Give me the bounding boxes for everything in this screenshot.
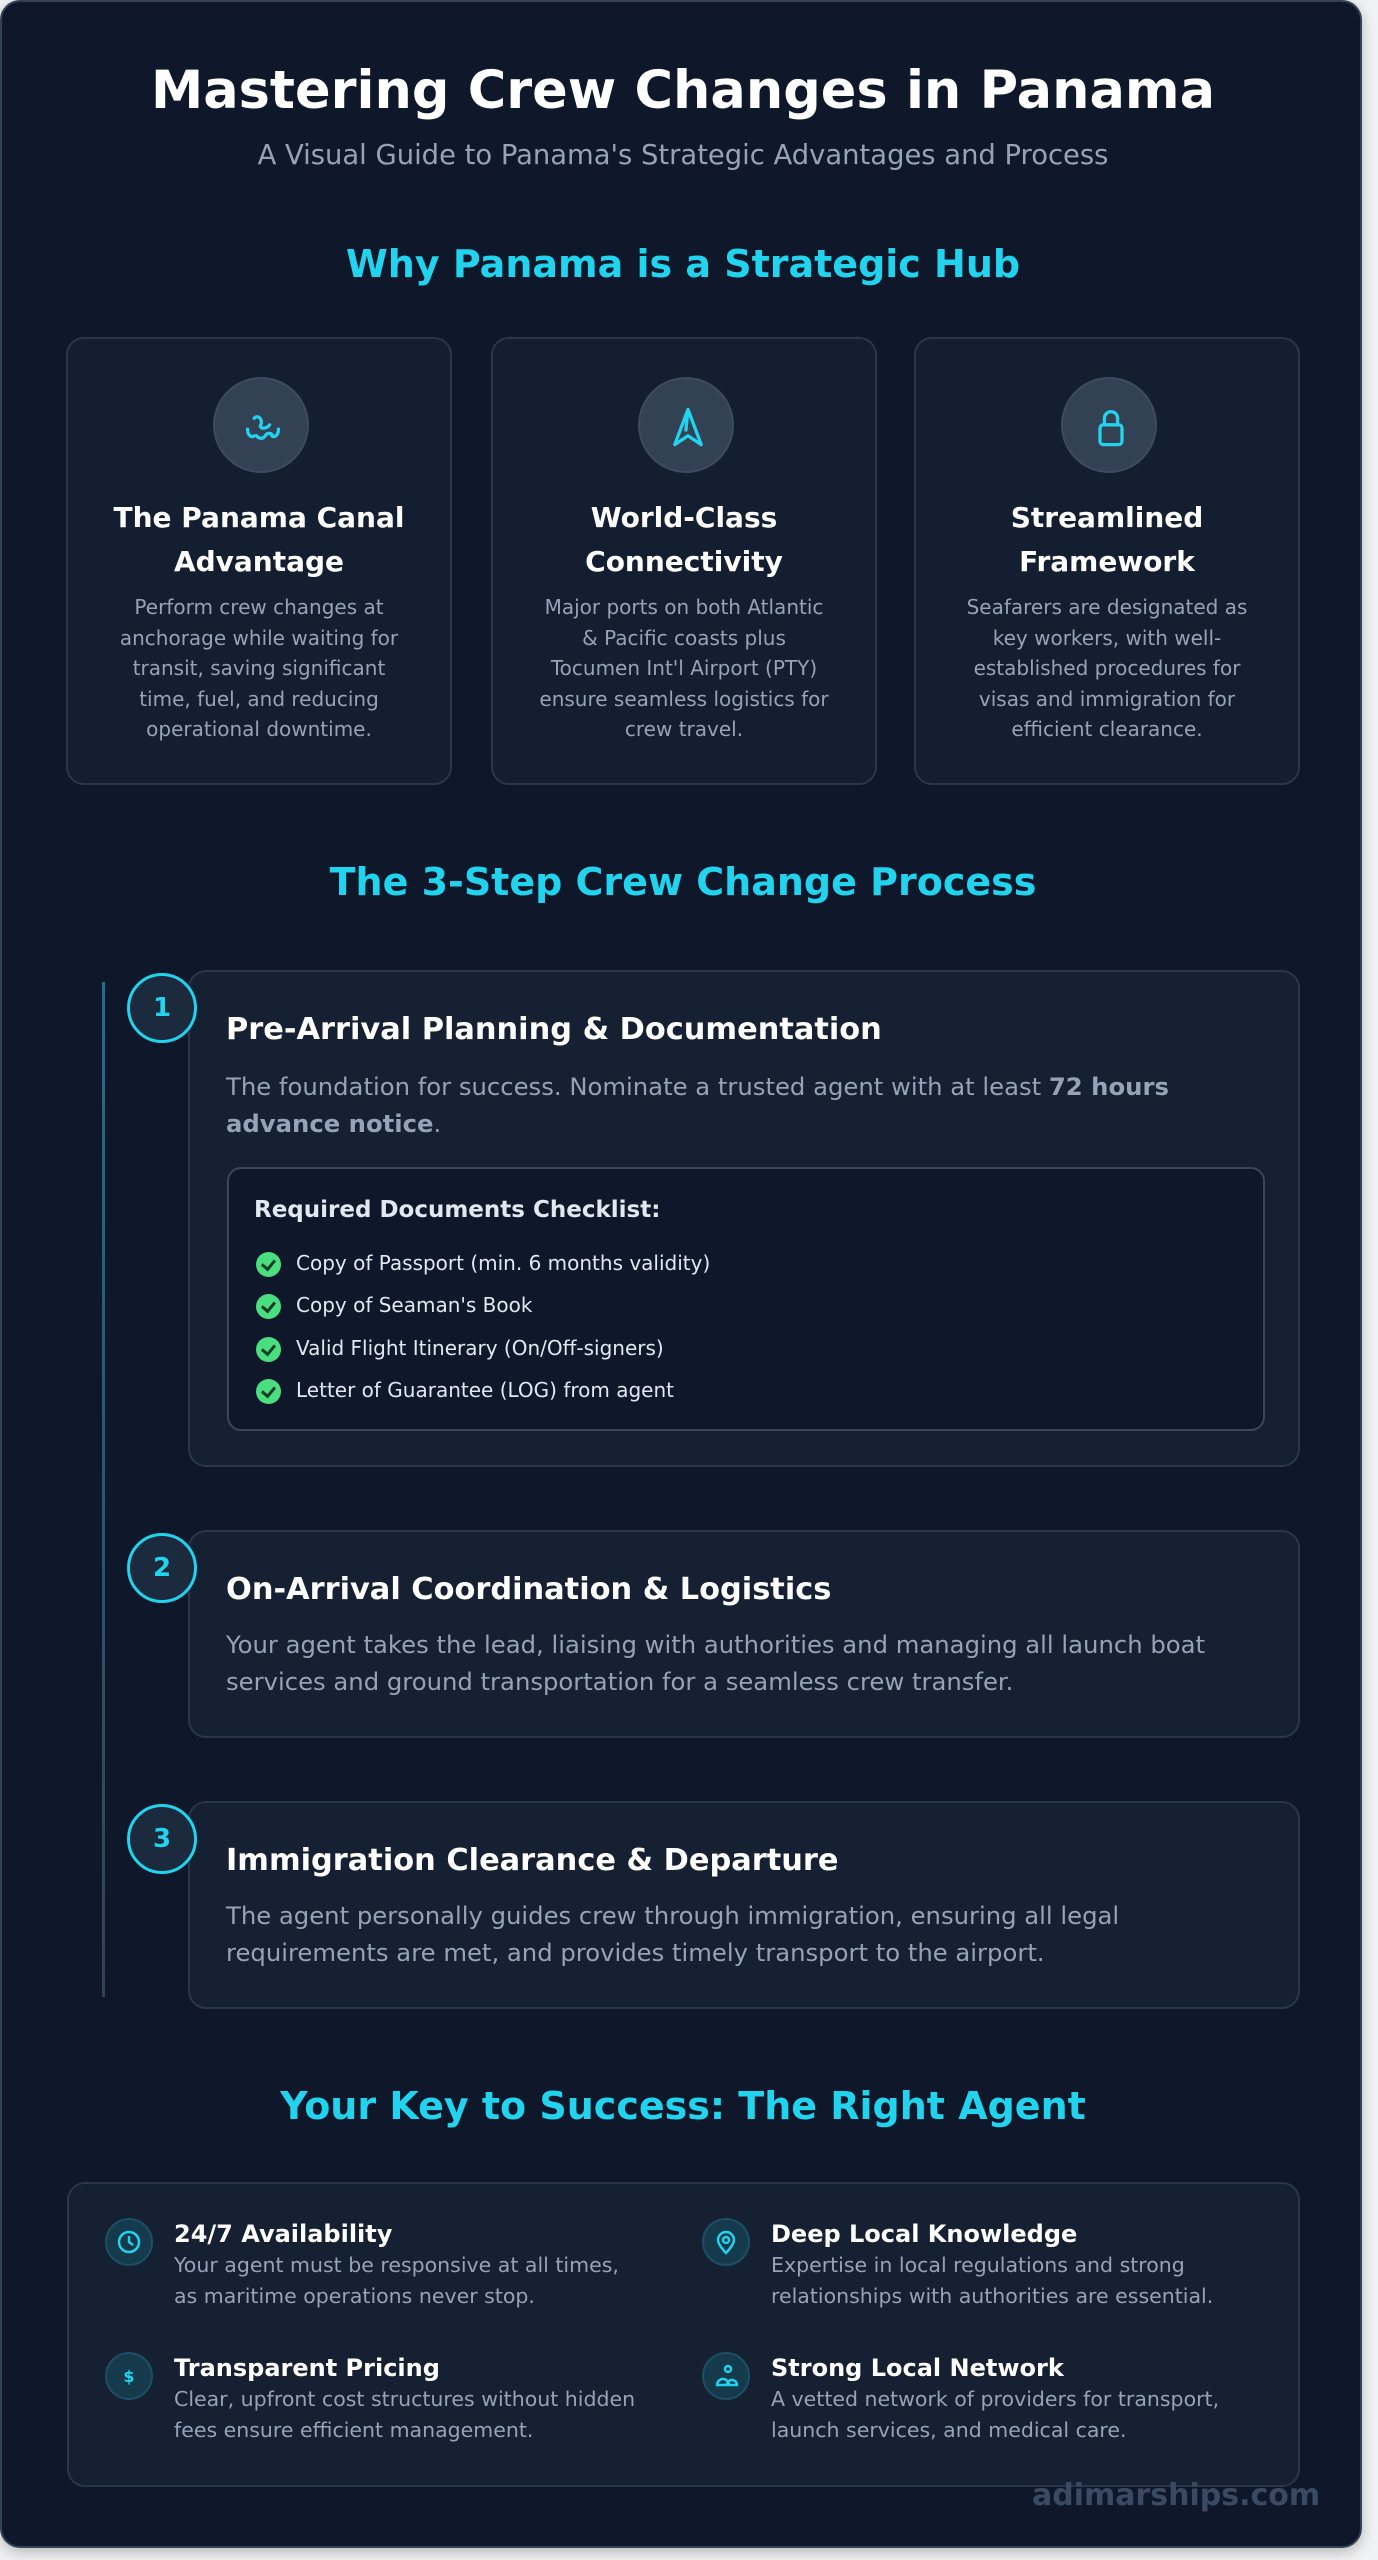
title: Transparent Pricing: [174, 2354, 440, 2382]
item: Copy of Seaman's Book: [296, 1293, 532, 1317]
title: 24/7 Availability: [174, 2220, 392, 2248]
text: Your agent must be responsive at all times,: [174, 2253, 619, 2277]
heading: process: The 3-Step Crew Change Process: [330, 860, 1036, 904]
icon: plane: [638, 377, 734, 473]
icon: ship: [213, 377, 309, 473]
heading: key to success: Your Key to Success: The Right Agent: [280, 2084, 1086, 2128]
step text: The foundation for success. Nominate a trusted agent with at least 72 hours advance notice.: [226, 1072, 1169, 1138]
title: Strong Local Network: [771, 2354, 1064, 2382]
step title: Immigration Clearance & Departure: [226, 1843, 838, 1878]
step 2 card: [188, 1530, 1300, 1738]
step 1 number: [127, 973, 197, 1043]
step 3 number: [127, 1804, 197, 1874]
step 3 number: 3: [153, 1824, 171, 1854]
panel: agent qualities: [67, 2182, 1300, 2487]
text: as maritime operations never stop.: [174, 2284, 535, 2308]
text: Expertise in local regulations and strong: [771, 2253, 1185, 2277]
timeline line: [102, 982, 105, 1997]
text: launch services, and medical care.: [771, 2418, 1127, 2442]
watermark: adimarships.com: [1032, 2478, 1320, 2513]
step title: On-Arrival Coordination & Logistics: [226, 1572, 831, 1607]
icon: network: [702, 2352, 750, 2400]
step 2 number: 2: [153, 1553, 171, 1583]
step 2 number: [127, 1533, 197, 1603]
card: panama canal: [66, 337, 452, 785]
item: Valid Flight Itinerary (On/Off-signers): [296, 1336, 664, 1360]
text: [174, 2387, 635, 2442]
card title: World-Class Connectivity: [585, 501, 783, 578]
card text: Perform crew changes at anchorage while waiting for transit, saving significant time, fuel, and reducing operational downtime.: [120, 595, 398, 741]
heading: why panama: Why Panama is a Strategic Hub: [346, 242, 1020, 286]
icon: clock: [105, 2218, 153, 2266]
item: Copy of Passport (min. 6 months validity): [296, 1251, 710, 1275]
step 1 card: [188, 970, 1300, 1467]
text: [771, 2253, 1213, 2308]
step title: Pre-Arrival Planning & Documentation: [226, 1012, 882, 1047]
card text: Seafarers are designated as key workers, with well-established procedures for visas and immigration for efficient clearance.: [967, 595, 1247, 741]
text: fees ensure efficient management.: [174, 2418, 533, 2442]
icon: lock: [1061, 377, 1157, 473]
icon: dollar: [105, 2352, 153, 2400]
text: Clear, upfront cost structures without hidden: [174, 2387, 635, 2411]
text: relationships with authorities are essential.: [771, 2284, 1213, 2308]
card title: Streamlined Framework: [1011, 501, 1203, 578]
checklist heading: Required Documents Checklist:: [254, 1197, 660, 1223]
card text: Major ports on both Atlantic & Pacific coasts plus Tocumen Int'l Airport (PTY) ensure seamless logistics for crew travel.: [539, 595, 829, 741]
item: Letter of Guarantee (LOG) from agent: [296, 1378, 674, 1402]
text: [771, 2387, 1219, 2442]
title: Mastering Crew Changes in Panama: [151, 60, 1215, 121]
icon: dollar: $: [123, 2367, 135, 2386]
card title: The Panama Canal Advantage: [114, 501, 404, 578]
step 3 card: [188, 1801, 1300, 2009]
title: Deep Local Knowledge: [771, 2220, 1077, 2248]
checklist: [227, 1167, 1265, 1431]
step text: Your agent takes the lead, liaising with authorities and managing all launch boat services and ground transportation for a seamless crew transfer.: [226, 1630, 1205, 1696]
card: connectivity: [491, 337, 877, 785]
text: [174, 2253, 619, 2308]
step 1 number: 1: [153, 993, 171, 1023]
step text: The agent personally guides crew through immigration, ensuring all legal requirements are met, and provides timely transport to the airport.: [226, 1901, 1119, 1967]
icon: location: [702, 2218, 750, 2266]
text: A vetted network of providers for transport,: [771, 2387, 1219, 2411]
card: framework: [914, 337, 1300, 785]
subtitle: A Visual Guide to Panama's Strategic Advantages and Process: [258, 140, 1108, 171]
